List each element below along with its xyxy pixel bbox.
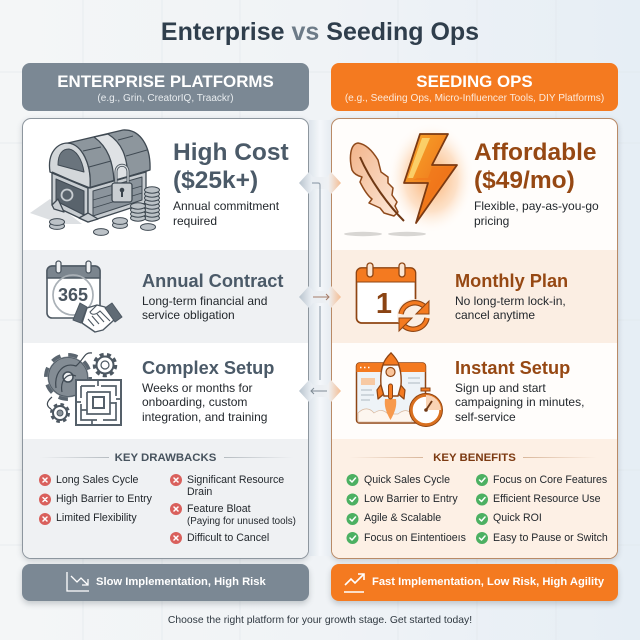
seeding ops examples: (e.g., Seeding Ops, Micro-Influencer Tools, DIY Platforms) bbox=[345, 93, 604, 104]
complex setup note: Weeks or months for bbox=[142, 381, 252, 395]
item: Significant Resource bbox=[187, 474, 284, 486]
text block: monthly plan bbox=[455, 271, 568, 322]
instant setup note line 2: campaigning in minutes, bbox=[455, 395, 584, 409]
affordable note: Flexible, pay-as-you-go bbox=[474, 199, 599, 213]
key drawbacks background bbox=[23, 439, 308, 559]
icon: trend down bbox=[66, 572, 89, 592]
complex setup note line 2: onboarding, custom bbox=[142, 395, 247, 409]
monthly plan note line 2: cancel anytime bbox=[455, 308, 535, 322]
text block: annual contract bbox=[142, 271, 284, 322]
complex setup heading: Complex Setup bbox=[142, 358, 274, 378]
item: Difficult to Cancel bbox=[187, 532, 269, 544]
item: Low Barrier to Entry bbox=[364, 493, 458, 505]
drawback list bbox=[39, 474, 182, 544]
divider right bbox=[224, 457, 293, 458]
item: High Barrier to Entry bbox=[56, 493, 152, 505]
item note: (Paying for unused tools) bbox=[187, 516, 296, 527]
panel: seeding ops card bbox=[331, 118, 618, 559]
key drawbacks heading: KEY DRAWBACKS bbox=[115, 452, 216, 464]
high cost price: ($25k+) bbox=[173, 167, 258, 194]
item: Quick Sales Cycle bbox=[364, 474, 450, 486]
enterprise heading: ENTERPRISE PLATFORMS bbox=[57, 72, 274, 90]
item: Quick ROI bbox=[493, 512, 542, 524]
instant setup note: Sign up and start bbox=[455, 381, 546, 395]
monthly plan note: No long-term lock-in, bbox=[455, 294, 566, 308]
annual contract heading: Annual Contract bbox=[142, 271, 283, 291]
key benefits heading: KEY BENEFITS bbox=[433, 452, 516, 464]
affordable heading: Affordable bbox=[474, 139, 596, 166]
closing line: Choose the right platform for your growth stage. Get started today! bbox=[168, 615, 472, 626]
icon: 365 calendar and handshake: 365 bbox=[58, 285, 88, 305]
item: Feature Bloat bbox=[187, 503, 251, 515]
affordable price: ($49/mo) bbox=[474, 167, 575, 194]
text block: complex setup bbox=[142, 358, 274, 424]
row: monthly plan background bbox=[332, 250, 617, 343]
instant setup heading: Instant Setup bbox=[455, 358, 570, 378]
text block: high cost bbox=[173, 139, 289, 228]
item: Focus on Core Features bbox=[493, 474, 607, 486]
high cost heading: High Cost bbox=[173, 139, 289, 166]
panel: enterprise header bbox=[22, 63, 309, 111]
item: Efficient Resource Use bbox=[493, 493, 601, 505]
instant setup note line 3: self-service bbox=[455, 410, 516, 424]
divider right bbox=[523, 457, 597, 458]
monthly plan heading: Monthly Plan bbox=[455, 271, 568, 291]
item: Long Sales Cycle bbox=[56, 474, 138, 486]
title: Enterprise vs Seeding Ops bbox=[161, 18, 479, 46]
item: Limited Flexibility bbox=[56, 512, 137, 524]
key benefits background bbox=[332, 439, 617, 559]
panel: slow implementation footer bbox=[22, 564, 309, 601]
divider left bbox=[40, 457, 109, 458]
high cost note line 2: required bbox=[173, 214, 217, 228]
item: Easy to Pause or Switch bbox=[493, 532, 608, 544]
high cost note: Annual commitment bbox=[173, 199, 279, 213]
enterprise examples: (e.g., Grin, CreatorIQ, Traackr) bbox=[97, 93, 234, 104]
text block: affordable bbox=[474, 139, 599, 228]
panel: seeding ops header bbox=[331, 63, 618, 111]
panel: key drawbacks bbox=[39, 452, 296, 544]
item: Agile & Scalable bbox=[364, 512, 441, 524]
item: Focus on Eintentioeıs bbox=[364, 532, 466, 544]
item continuation: Drain bbox=[187, 486, 212, 498]
annual contract note: Long-term financial and bbox=[142, 294, 267, 308]
panel: fast implementation footer bbox=[331, 564, 618, 601]
icon: monthly calendar with refresh: 1 bbox=[376, 288, 392, 320]
row: annual contract background bbox=[23, 250, 308, 343]
text block: instant setup bbox=[455, 358, 584, 424]
fast implementation text: Fast Implementation, Low Risk, High Agility bbox=[372, 576, 604, 588]
icon: trend up bbox=[344, 573, 365, 593]
divider left bbox=[349, 457, 423, 458]
seeding ops heading: SEEDING OPS bbox=[416, 72, 533, 90]
affordable note line 2: pricing bbox=[474, 214, 509, 228]
benefit list bbox=[346, 474, 488, 544]
panel: key benefits bbox=[346, 452, 608, 544]
annual contract note line 2: service obligation bbox=[142, 308, 235, 322]
panel: enterprise card bbox=[22, 118, 309, 559]
complex setup note line 3: integration, and training bbox=[142, 410, 267, 424]
slow implementation text: Slow Implementation, High Risk bbox=[96, 576, 266, 588]
